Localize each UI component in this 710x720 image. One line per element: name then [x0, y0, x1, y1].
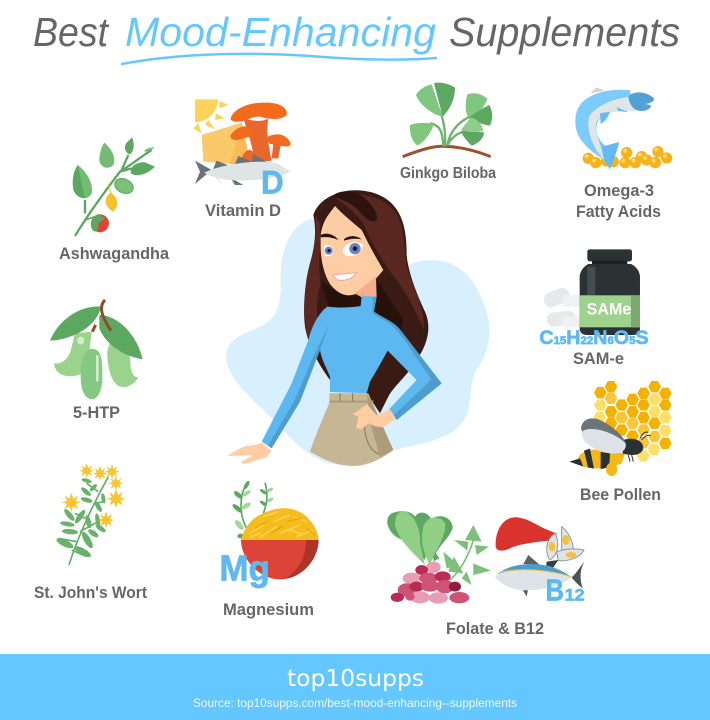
title: Best: [33, 9, 109, 55]
label: Vitamin D: [205, 202, 281, 220]
eyes: [323, 242, 363, 256]
footer banner: top10supps: [287, 666, 424, 692]
bee body: [578, 450, 625, 468]
label: Ashwagandha: [59, 245, 170, 263]
eyebrows: [321, 234, 362, 241]
left hand on table: [227, 443, 272, 464]
beans: [391, 562, 469, 604]
B12 letters: B: [546, 574, 564, 608]
hair strand left: [305, 215, 321, 337]
label: Omega-3: [584, 182, 654, 200]
icon: folate and B12 foods: [387, 511, 585, 608]
Mg letters: Mg: [219, 548, 270, 589]
label: Ginkgo Biloba: [400, 165, 496, 182]
label: SAM-e: [573, 350, 624, 368]
icon: folate and B12 foods: 12: [565, 586, 585, 605]
back hair: [304, 190, 428, 413]
D letter: D: [261, 164, 284, 200]
herbs: [241, 483, 267, 528]
footer banner: [0, 654, 710, 720]
icon: SAM-e bottle: [539, 249, 649, 349]
label: Fatty Acids: [576, 203, 661, 221]
icon: St. John's Wort: [55, 463, 126, 565]
honeycomb: [593, 381, 672, 462]
label: 5-HTP: [73, 404, 120, 422]
bee wings: [581, 418, 627, 445]
grains: [241, 508, 319, 540]
title: [33, 9, 680, 64]
capsules: [583, 146, 672, 168]
background blob: [226, 218, 490, 465]
icon: bee and honeycomb: [569, 381, 672, 476]
neck shadow: [320, 280, 403, 350]
label: [576, 182, 661, 221]
icon: 5-HTP: [50, 300, 143, 399]
skirt: [310, 393, 393, 466]
label: St. John's Wort: [34, 584, 147, 602]
icon: ginkgo: [403, 83, 492, 157]
skirt shadow and pocket: [329, 393, 393, 457]
icon: magnesium bowl: [219, 480, 319, 589]
icon: ashwagandha plant: [73, 137, 155, 236]
neck: [355, 277, 377, 297]
sweater shadow: [268, 297, 442, 448]
sun: [193, 99, 228, 133]
hair top lock: [332, 191, 377, 221]
tuna: [522, 555, 540, 597]
label: Folate & B12: [446, 620, 544, 638]
belt loops: [340, 393, 379, 454]
icon: vitamin D foods: [193, 99, 291, 200]
central woman illustration: [226, 190, 490, 466]
right hand on hip: [352, 404, 396, 429]
label: Magnesium: [223, 601, 314, 619]
icon: SAM-e bottle: SAMe: [587, 299, 631, 318]
chemical formula: C15H22N6O5S: [539, 328, 649, 349]
parsley: [450, 533, 475, 580]
label: Bee Pollen: [580, 486, 661, 504]
mouth: [333, 272, 357, 280]
fish: [195, 161, 212, 184]
mushrooms: [243, 118, 272, 163]
icon: omega-3 fish and capsules: [575, 87, 672, 169]
mussels: [562, 527, 573, 550]
title: Supplements: [449, 9, 680, 55]
lighter hair strands: [333, 194, 424, 330]
sweater: [262, 296, 442, 448]
title: Mood-Enhancing: [125, 9, 436, 55]
pills: [542, 286, 583, 328]
flowers: [62, 463, 126, 528]
face: [321, 206, 383, 295]
footer banner: Source: top10supps.com/best-mood-enhancing--supplements: [193, 696, 517, 710]
cheese: [202, 123, 248, 165]
liver: [496, 517, 557, 551]
spinach: [387, 511, 432, 560]
fish: [575, 90, 633, 160]
bowl: [241, 539, 319, 579]
